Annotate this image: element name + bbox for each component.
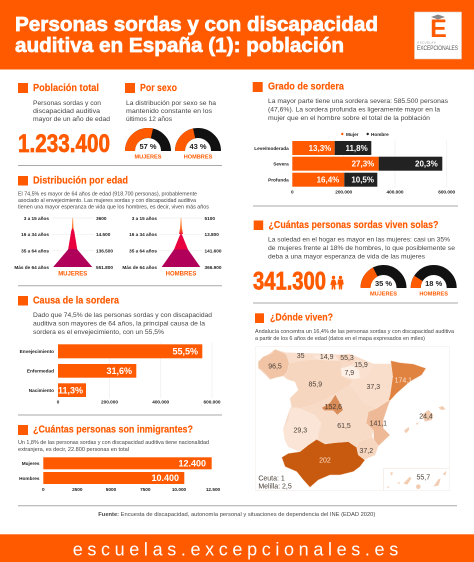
pyramid chart: mujeres: 3 a 15 años xyxy=(24,216,49,221)
pyramid chart: hombres: HOMBRES xyxy=(166,272,196,278)
logo: E xyxy=(430,15,447,43)
map values: 202 xyxy=(319,458,331,465)
balearic islands xyxy=(404,406,446,433)
stacked bar chart: grado: 200.000 xyxy=(335,190,353,194)
text block xyxy=(268,98,448,122)
pyramid chart: mujeres: 16 a 34 años xyxy=(21,232,49,237)
heading: Población total xyxy=(33,82,99,94)
stacked bar chart: grado: 11,8% xyxy=(345,144,368,153)
mainland silhouette xyxy=(258,349,391,459)
bar chart: inmigrantes: 10.000 xyxy=(172,487,187,492)
text block: Personas sordas y con xyxy=(33,100,102,107)
stacked bar chart: grado: 10,5% xyxy=(351,176,374,185)
pyramid chart: hombres: 13.800 xyxy=(204,232,219,237)
text block: tienen una mayor esperanza de vida que los hombres, es decir, viven más años xyxy=(18,204,209,210)
title xyxy=(15,14,378,57)
map values: 96,5 xyxy=(268,363,282,370)
panel: dónde viven xyxy=(255,312,454,491)
stacked bar chart: grado: 600.000 xyxy=(438,190,456,194)
text block xyxy=(18,192,209,210)
bar chart: causas: 200.000 xyxy=(101,400,118,404)
footer banner xyxy=(0,534,474,562)
text block: extranjera, es decir, 22.800 personas en total xyxy=(18,447,129,453)
bar chart: causas: 400.000 xyxy=(152,400,170,404)
text block: de mujeres frente al 18% de hombres, lo que posiblemente se xyxy=(268,245,456,252)
text block: La mayor parte tiene una sordera severa: 585.500 personas xyxy=(268,98,448,105)
map values: 37,3 xyxy=(367,384,380,391)
text block: deba a una mayor esperanza de vida de las mujeres xyxy=(268,254,425,261)
logo: ESCUELAS xyxy=(418,42,436,44)
bar chart: causas: Envejecimiento xyxy=(20,349,54,354)
bar chart: causas: 11,3% xyxy=(58,386,83,396)
text block: auditiva son mayores de 64 años, la principal causa de la xyxy=(33,320,206,328)
heading: Grado de sordera xyxy=(268,81,344,93)
map values: 85,9 xyxy=(309,382,322,389)
text block xyxy=(268,236,456,261)
heading: Causa de la sordera xyxy=(33,294,119,306)
stacked bar chart: grado: 20,3% xyxy=(415,160,438,169)
text block: mujer que en el hombre sobre el total de la población xyxy=(268,115,431,122)
canary islands xyxy=(383,468,449,490)
pyramid chart: hombres: 141.600 xyxy=(204,248,222,254)
text block: últimos 12 años xyxy=(126,116,172,123)
map values: 61,5 xyxy=(337,423,351,430)
bar chart: inmigrantes xyxy=(19,457,221,492)
heading: ¿Cuántas personas son inmigrantes? xyxy=(33,424,193,436)
map values: 55,7 xyxy=(417,475,430,482)
gauge: mujeres 57%: 57 % xyxy=(139,142,157,151)
pyramid chart: mujeres xyxy=(14,216,113,278)
bar chart: causas: 600.000 xyxy=(204,400,221,404)
title: auditiva en España (1): población xyxy=(15,35,344,57)
map values xyxy=(258,353,433,490)
panel: distribución por edad xyxy=(14,174,222,278)
map values: 37,2 xyxy=(360,448,373,455)
gauge: hombres 18% xyxy=(416,270,452,298)
text block: Dado que 74,5% de las personas sordas y con discapacidad xyxy=(33,312,213,319)
gauge: hombres 18%: HOMBRES xyxy=(419,292,448,298)
text block: mayor de un año de edad xyxy=(33,116,111,123)
map of Spain xyxy=(256,347,449,491)
gauge: mujeres 57% xyxy=(130,133,166,160)
legend xyxy=(341,132,389,137)
text block: La distribución por sexo se ha xyxy=(126,100,217,107)
gauge: hombres 43%: 43 % xyxy=(189,142,207,151)
pyramid chart: mujeres: 551.800 xyxy=(96,265,113,270)
bar chart: causas: 0 xyxy=(57,400,60,404)
gauge: mujeres 57%: MUJERES xyxy=(134,154,162,160)
bar chart: causas: 31,6% xyxy=(106,366,132,376)
pyramid chart: hombres: 16 a 34 años xyxy=(129,232,157,237)
map values: 7,9 xyxy=(344,370,354,377)
gauge: mujeres 35%: MUJERES xyxy=(370,292,397,298)
stacked bar chart: grado xyxy=(254,140,456,194)
legend: Mujer xyxy=(346,132,359,137)
pyramid chart: hombres: 3 a 15 años xyxy=(132,216,157,221)
bar chart: inmigrantes: 12.500 xyxy=(206,487,221,492)
text block: discapacidad auditiva xyxy=(33,108,101,115)
stacked bar chart: grado: Profunda xyxy=(268,178,289,182)
panel: por sexo xyxy=(125,82,217,160)
text block: a partir de los 6 años de edad (datos en el mapa expresados en miles) xyxy=(255,336,425,342)
map values: 24,4 xyxy=(419,413,433,420)
map values: Ceuta: 1 xyxy=(258,476,285,483)
bar chart: causas: Enfermedad xyxy=(27,368,54,374)
gauge: mujeres 35% xyxy=(366,270,402,298)
text block xyxy=(18,440,209,453)
pyramid chart: hombres xyxy=(122,216,222,278)
logo: EXCEPCIONALES xyxy=(417,46,458,52)
title: Personas sordas y con discapacidad xyxy=(15,14,378,36)
gauge: mujeres 35%: 35 % xyxy=(375,279,392,288)
pyramid chart: mujeres: 3600 xyxy=(96,216,107,221)
pyramid chart: hombres: 5100 xyxy=(204,216,215,221)
text block: mantenido constante en los xyxy=(126,108,212,115)
pyramid chart: hombres: 366.900 xyxy=(204,265,222,270)
pyramid chart: hombres: Más de 64 años xyxy=(122,265,157,270)
logo xyxy=(414,12,462,59)
map values: 152,6 xyxy=(325,404,342,411)
text block xyxy=(33,312,213,336)
bar chart: inmigrantes: 5000 xyxy=(106,487,117,492)
bar chart: inmigrantes: 10.400 xyxy=(151,473,179,483)
panel: inmigrantes xyxy=(18,424,221,492)
text block: La soledad en el hogar es mayor en las mujeres: casi un 35% xyxy=(268,236,450,243)
stacked bar chart: grado: 13,3% xyxy=(309,144,331,153)
panel: grado de sordera xyxy=(253,81,456,194)
text block: (47,6%). La sordera profunda es ligeramente mayor en la xyxy=(268,106,441,114)
bar chart: causas: 55,5% xyxy=(172,346,198,356)
big number: 341.300 xyxy=(253,267,326,295)
text block: Un 1,8% de las personas sordas y con discapacidad auditiva tiene nacionalidad xyxy=(18,440,209,446)
header banner xyxy=(0,0,474,70)
region polygons xyxy=(258,349,426,487)
pyramid chart: mujeres: 14.500 xyxy=(96,232,111,237)
bar chart: inmigrantes: 7500 xyxy=(140,487,151,492)
bar chart: causas xyxy=(20,343,221,404)
map values: 55,3 xyxy=(340,355,354,362)
text block xyxy=(126,100,217,123)
map values: 35 xyxy=(297,353,305,360)
stacked bar chart: grado: Severa xyxy=(273,162,289,166)
bar chart: inmigrantes: 2500 xyxy=(72,487,83,492)
text block xyxy=(33,100,111,123)
heading: Distribución por edad xyxy=(33,174,128,186)
icon: people xyxy=(330,276,344,290)
panel: causa de la sordera xyxy=(18,294,221,404)
bar chart: inmigrantes: Hombres xyxy=(19,476,40,481)
map values: 14,9 xyxy=(320,354,334,361)
text block: sordera es el envejecimiento, con un 55,5% xyxy=(33,329,164,336)
big number: 1.233.400 xyxy=(18,130,110,158)
pyramid chart: mujeres: Más de 64 años xyxy=(14,265,49,270)
pyramid chart: mujeres: 35 a 64 años xyxy=(21,248,49,254)
map values: 29,3 xyxy=(294,427,307,434)
pyramid chart: mujeres: MUJERES xyxy=(58,272,87,278)
panel: viven solas xyxy=(253,219,456,298)
text block xyxy=(255,329,454,342)
text block: El 74,5% es mayor de 64 años de edad (918.700 personas), probablemente xyxy=(18,192,197,198)
gauge: hombres 43%: HOMBRES xyxy=(184,154,213,160)
map values: 141,1 xyxy=(370,421,387,428)
stacked bar chart: grado: 0 xyxy=(291,190,294,194)
bar chart: inmigrantes: Mujeres xyxy=(22,461,40,466)
legend: Hombre xyxy=(371,132,389,137)
map values: Melilla: 2,5 xyxy=(258,483,292,490)
bar chart: inmigrantes: 0 xyxy=(42,487,45,492)
map values: 15,9 xyxy=(354,362,368,369)
map values: 174,1 xyxy=(395,377,412,384)
gauge: hombres 18%: 18 % xyxy=(425,279,443,288)
stacked bar chart: grado: 16,4% xyxy=(317,176,339,185)
pyramid chart: mujeres: 136.500 xyxy=(96,248,113,254)
panel: población total xyxy=(18,82,111,158)
heading: Por sexo xyxy=(140,82,177,94)
heading: ¿Cuántas personas sordas viven solas? xyxy=(268,219,438,231)
heading: ¿Dónde viven? xyxy=(270,312,333,324)
stacked bar chart: grado: 27,3% xyxy=(352,160,374,169)
source note: Fuente: Encuesta de discapacidad, autonomía personal y situaciones de dependencia del INE (EDAD 2020) xyxy=(98,512,376,518)
text block: Andalucía concentra un 16,4% de las personas sordas y con discapacidad auditiva xyxy=(255,329,454,335)
gauge: hombres 43% xyxy=(180,133,216,160)
stacked bar chart: grado: 400.000 xyxy=(387,190,404,194)
footer banner: escuelas.excepcionales.es xyxy=(73,540,398,560)
text block: asociado al envejecimiento. Las mujeres sordas y con discapacidad auditiva xyxy=(18,198,196,204)
bar chart: causas: Nacimiento xyxy=(29,388,54,393)
bar chart: inmigrantes: 12.400 xyxy=(178,458,206,468)
pyramid chart: hombres: 35 a 64 años xyxy=(129,248,157,254)
stacked bar chart: grado: Leve/moderada xyxy=(254,146,289,151)
